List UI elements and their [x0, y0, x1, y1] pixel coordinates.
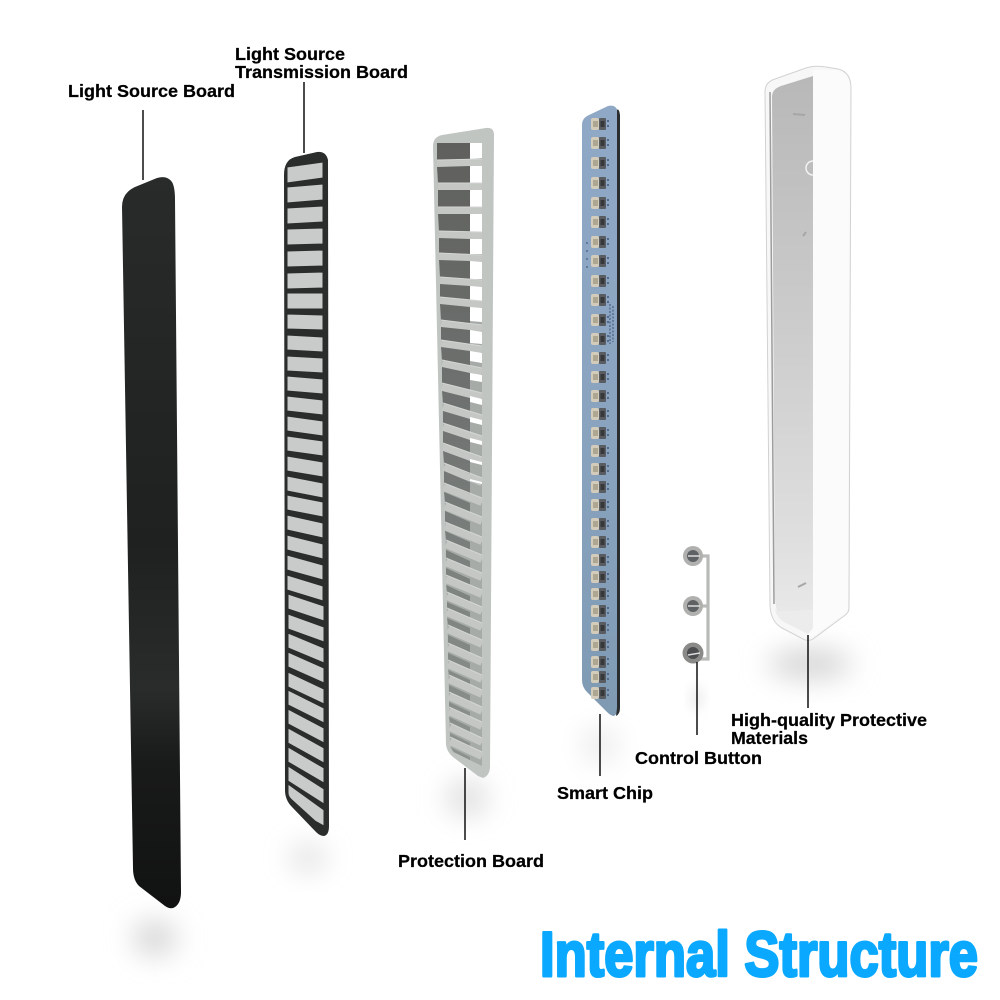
part: control button bracket with three buttons [682, 546, 708, 664]
label: protection board: Protection Board [398, 851, 544, 871]
leader lines [143, 82, 808, 840]
white see-through windows [470, 143, 482, 484]
board silkscreen marks [587, 242, 613, 344]
part: light source transmission board (black frame with grey slats) [284, 152, 329, 836]
label: high-quality protective materials [731, 710, 927, 748]
label: control button: Control Button [635, 748, 762, 768]
label: light source board: Light Source Board [68, 81, 235, 101]
label: high-quality protective materials: High-quality Protective [731, 710, 927, 730]
label: light source transmission board: Light Source [235, 44, 345, 64]
case inner screw ring [806, 161, 813, 175]
label: light source transmission board [235, 44, 408, 82]
part: protection board (grey louvred frame) [433, 128, 494, 778]
slat bands [437, 163, 482, 756]
label: light source transmission board: Transmission Board [235, 62, 408, 82]
slat highlights [437, 159, 482, 752]
inner recess base [437, 143, 482, 766]
LED row [591, 118, 609, 699]
dark cell recesses [437, 143, 470, 760]
label: high-quality protective materials: Materials [731, 728, 808, 748]
label: smart chip: Smart Chip [557, 783, 653, 803]
part: high-quality protective case [765, 66, 851, 640]
part: light source board (black panel) [122, 177, 181, 908]
part: smart chip circuit board [582, 106, 620, 716]
shadows beneath the parts [133, 649, 852, 956]
